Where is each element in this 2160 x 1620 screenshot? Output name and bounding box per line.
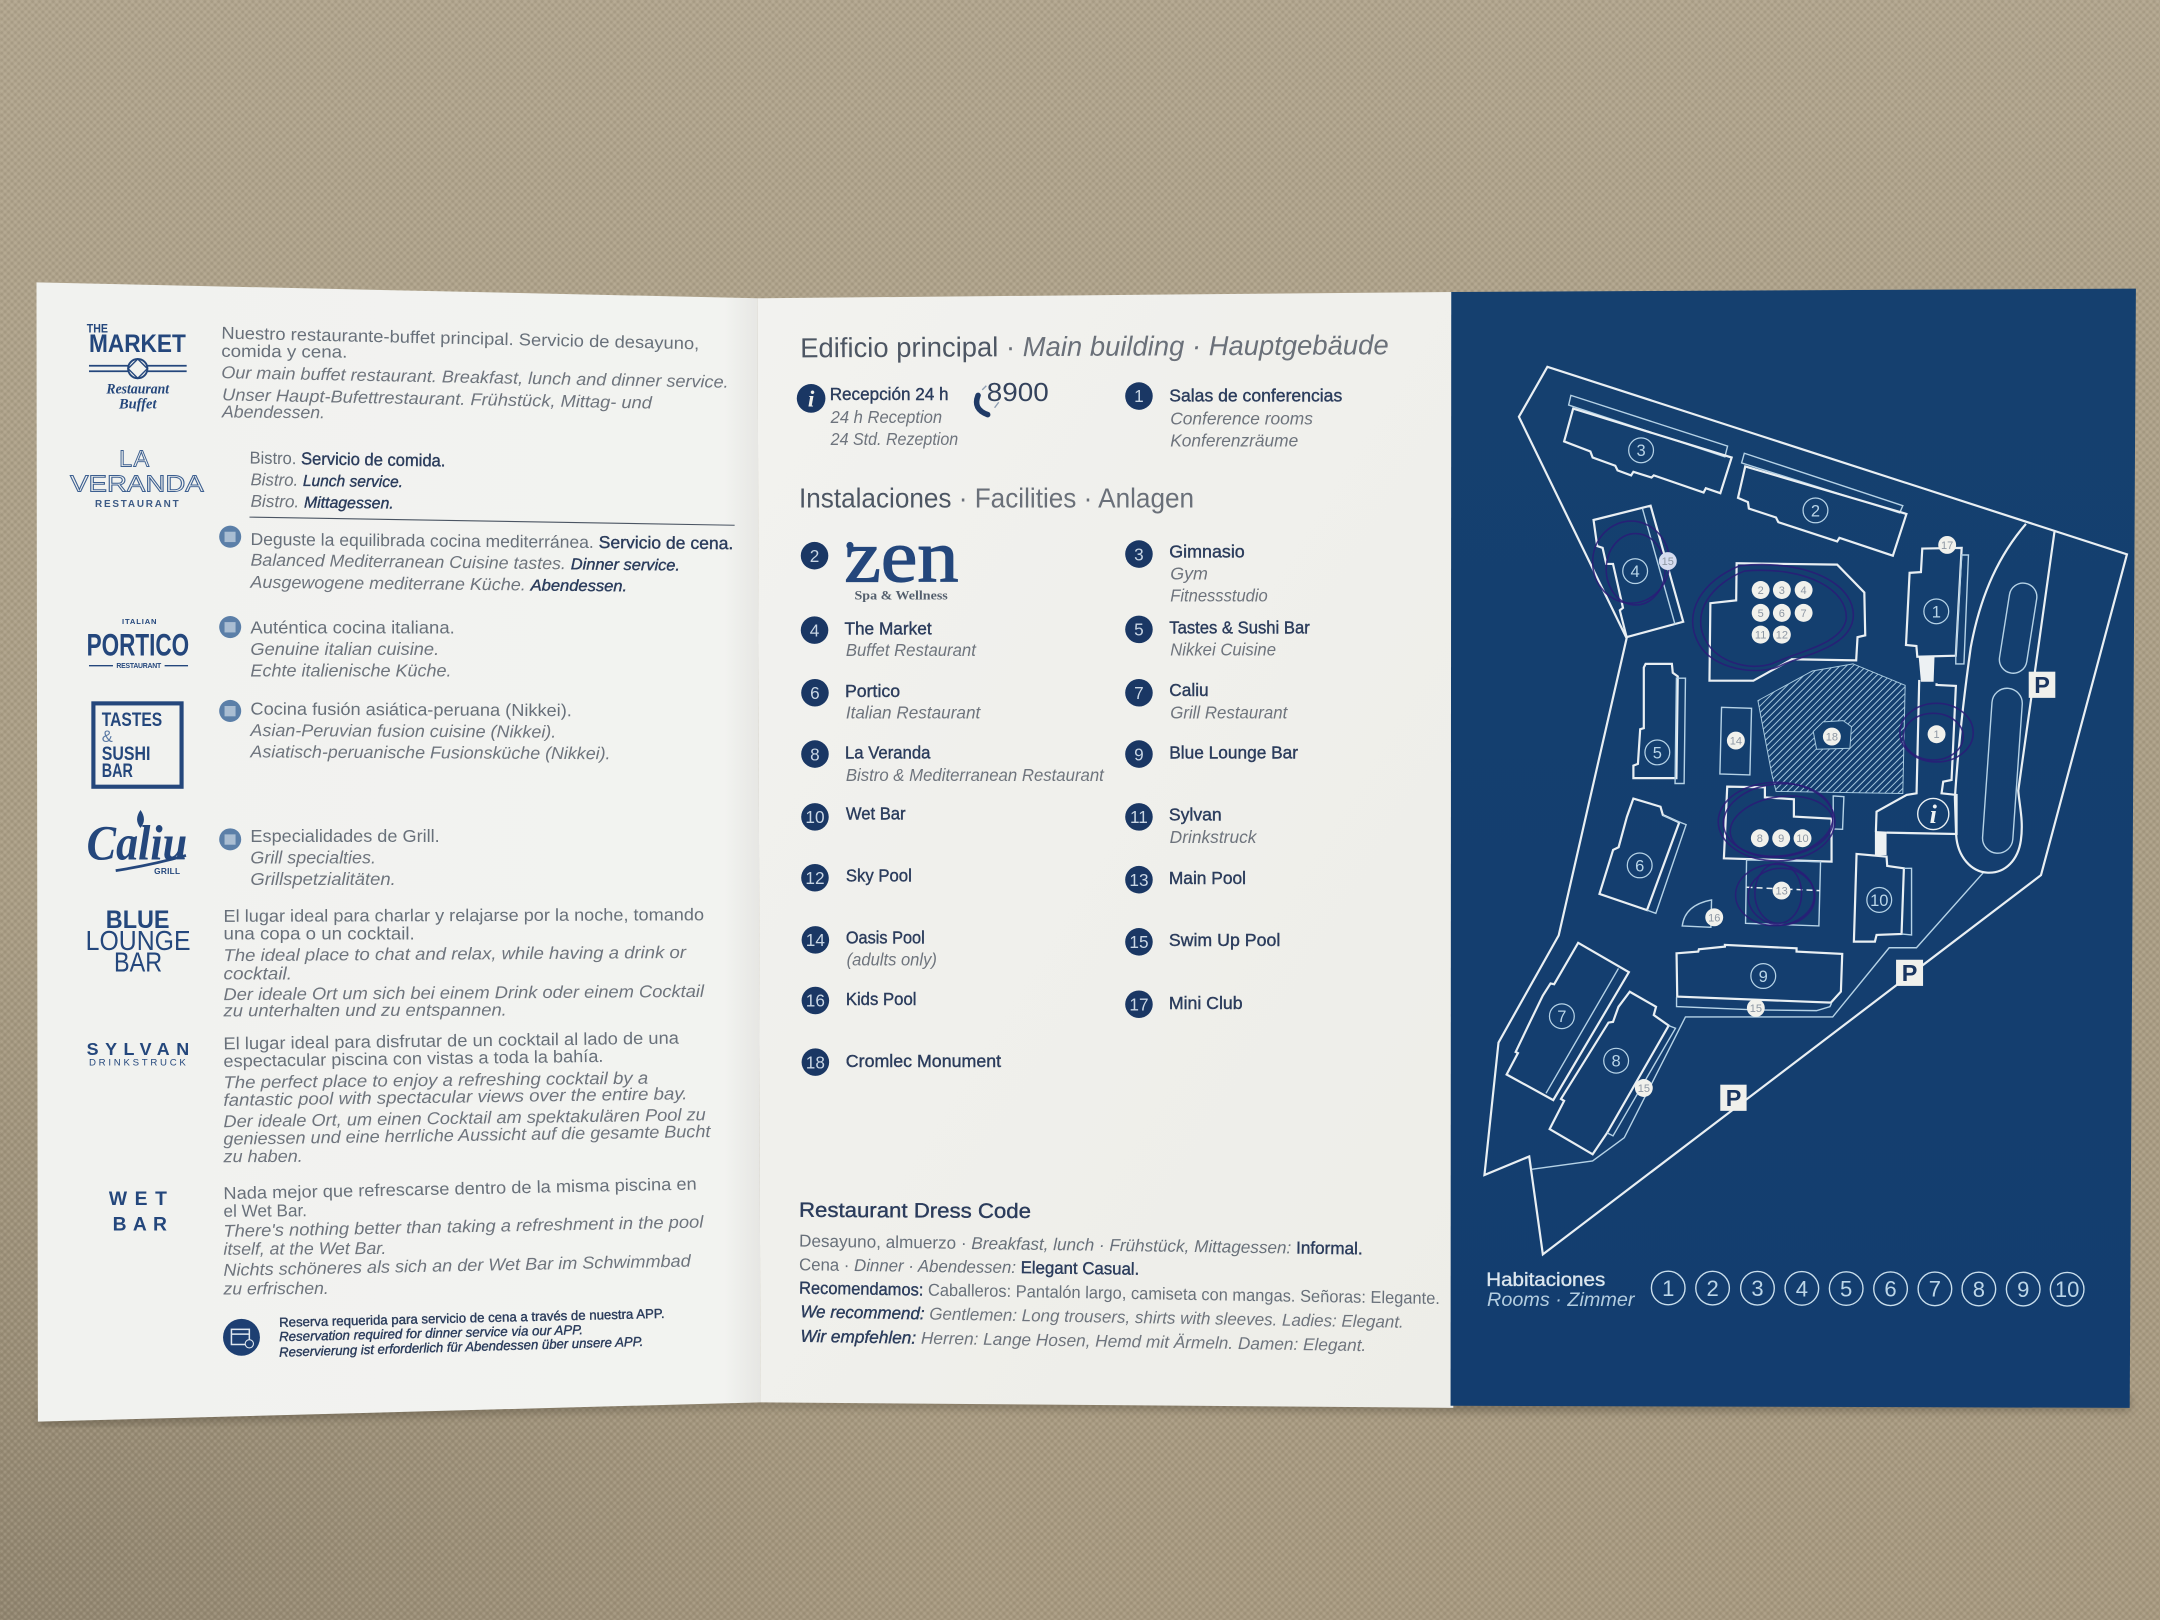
text: The Market description: [221, 323, 729, 422]
map: cromlec hatched area: [1758, 664, 1905, 793]
logo: The Market: [87, 322, 187, 413]
item 15: swim up pool: Swim Up Pool: [1169, 930, 1280, 950]
legend: room numbers: 5: [1840, 1276, 1852, 1301]
item 3: gym: 3: [1134, 544, 1144, 564]
text: dress code: Cena · Dinner · Abendessen: Elegant Casual.: [799, 1254, 1139, 1279]
item 16: kids pool: Kids Pool: [846, 989, 916, 1009]
text: Sylvan description: geniessen und eine herrliche Aussicht auf die gesamte Bucht: [223, 1121, 712, 1149]
map: facility number markers: 14: [1730, 736, 1742, 748]
reception wing: [1875, 680, 1957, 855]
icon: calendar: [219, 828, 241, 850]
reception info: i: [808, 386, 815, 412]
logo: Caliu: GRILL: [154, 867, 180, 876]
text: Wet Bar description: zu erfrischen.: [222, 1278, 329, 1298]
text: La Veranda lunch: Bistro. Servicio de comida.: [249, 448, 446, 470]
map: parking signs: P: [1902, 960, 1917, 986]
main building: [1709, 563, 1865, 681]
map: building number markers: 6: [1635, 856, 1644, 875]
item 8: la veranda: La Veranda: [845, 742, 931, 762]
item 14: oasis pool: 14: [806, 930, 825, 950]
building 8: [1550, 992, 1676, 1154]
map: facility number markers: [1635, 536, 1956, 1097]
map: site boundary: [1484, 367, 2127, 1254]
text: Wet Bar description: Nichts schöneres als sich an der Wet Bar im Schwimmbad: [223, 1250, 692, 1280]
panel: restaurants: [37, 282, 760, 1422]
text: Portico description: Auténtica cocina italiana.: [250, 618, 455, 638]
text: Tastes description: Cocina fusión asiática-peruana (Nikkei).: [250, 699, 572, 720]
building 1: [1906, 548, 1968, 682]
item 10: wet bar: [801, 803, 906, 831]
heading: dress code: Restaurant Dress Code: [799, 1199, 1031, 1223]
item 11: sylvan: Sylvan: [1169, 805, 1222, 825]
logo: La Veranda: VERANDA: [70, 470, 204, 496]
item 11: sylvan: [1125, 803, 1258, 847]
item 4: the market: Buffet Restaurant: [846, 640, 977, 660]
map: building number markers: 2: [1811, 501, 1820, 520]
reception info: Recepción 24 h: [830, 384, 949, 404]
item 13: main pool: 13: [1129, 870, 1149, 890]
logo: La Veranda: LA: [119, 445, 151, 471]
item 15: swim up pool: [1125, 928, 1280, 956]
restaurant building: [1724, 787, 1844, 862]
map: facility number markers: 2: [1758, 585, 1764, 597]
item 15: swim up pool: 15: [1129, 932, 1149, 952]
item 7: caliu: Grill Restaurant: [1170, 702, 1289, 722]
map: facility number markers: 11: [1755, 630, 1766, 642]
map: facility number markers: 5: [1758, 608, 1764, 620]
item 9: blue lounge: Blue Lounge Bar: [1169, 742, 1298, 762]
map: facility number markers: 13: [1775, 886, 1788, 898]
text: The Market description: comida y cena.: [221, 341, 347, 362]
map: parking signs: P: [1726, 1085, 1741, 1111]
map: facility number markers: 18: [1826, 732, 1838, 744]
item 17: mini club: [1125, 990, 1243, 1018]
item 1: conference rooms: Konferenzräume: [1170, 431, 1298, 451]
item 13: main pool: Main Pool: [1169, 868, 1246, 888]
text: The Market description: Abendessen.: [221, 401, 325, 422]
map: info marker: [1918, 798, 1949, 830]
text: dress code: Desayuno, almuerzo · Breakfast, lunch · Frühstück, Mittagessen: Informal.: [799, 1231, 1363, 1258]
text: Caliu description: Grill specialties.: [250, 847, 376, 867]
phone number: 8900: [987, 379, 1049, 407]
text: The Market description: Our main buffet restaurant. Breakfast, lunch and dinner service.: [221, 362, 729, 392]
item 8: la veranda: Bistro & Mediterranean Restaurant: [846, 765, 1105, 785]
item 14: oasis pool: Oasis Pool: [846, 928, 925, 948]
logo: Wet Bar: WET: [109, 1189, 167, 1210]
logo: Wet Bar: BAR: [113, 1214, 167, 1235]
text: Portico description: Genuine italian cuisine.: [250, 639, 439, 659]
icon: calendar: [219, 616, 241, 638]
icon: calendar: [219, 526, 241, 548]
legend: room numbers: 8: [1973, 1277, 1985, 1302]
item 8: la veranda: 8: [810, 744, 820, 764]
text: Tastes description: [249, 699, 611, 763]
item 12: sky pool: 12: [805, 868, 825, 888]
item 7: caliu: [1125, 679, 1289, 722]
logo: The Market: THE: [87, 322, 108, 336]
item 10: wet bar: Wet Bar: [846, 804, 906, 824]
legend: room numbers: 4: [1796, 1276, 1808, 1301]
text: dress code: We recommend: Gentlemen: Long trousers, shirts with sleeves. Ladies: Elegant.: [800, 1301, 1404, 1332]
icon: reservation calendar: [223, 1319, 260, 1356]
item 12: sky pool: Sky Pool: [846, 866, 912, 886]
logo: The Market: Buffet: [118, 397, 157, 413]
text: The Market description: Unser Haupt-Bufettrestaurant. Frühstück, Mittag- und: [222, 384, 654, 413]
map: facility number markers: 3: [1779, 585, 1785, 597]
item 7: caliu: 7: [1134, 683, 1144, 703]
item 11: sylvan: Drinkstruck: [1170, 827, 1258, 847]
logo: Sylvan: SYLVAN: [87, 1039, 189, 1059]
item 16: kids pool: 16: [806, 991, 825, 1011]
map: parking signs: P: [2034, 672, 2050, 698]
map: facility number markers: 15: [1750, 1003, 1762, 1015]
item 5: tastes: Nikkei Cuisine: [1170, 640, 1276, 660]
text: Blue Lounge description: una copa o un cocktail.: [224, 923, 415, 943]
kids pool 16: [1682, 900, 1712, 927]
reception info: [797, 384, 958, 449]
building 10: [1854, 854, 1912, 942]
legend: room numbers: 9: [2017, 1277, 2029, 1302]
legend: room numbers: 6: [1884, 1277, 1897, 1302]
legend: room numbers: 7: [1929, 1277, 1941, 1302]
building 9: [1677, 945, 1842, 1011]
logo: Tastes & Sushi Bar: TASTES: [102, 710, 162, 731]
item 3: gym: Fitnessstudio: [1170, 586, 1268, 606]
map: facility number markers: 7: [1801, 608, 1807, 620]
item 18: cromlec monument: Cromlec Monument: [846, 1051, 1001, 1071]
map: central buildings and pools: [1677, 680, 1957, 1011]
logo: The Market: Restaurant: [105, 382, 170, 398]
text: Caliu description: [250, 826, 440, 889]
map: facility number markers: 16: [1708, 912, 1720, 924]
item 6: portico: 6: [810, 683, 820, 703]
logo: Portico: PORTICO: [87, 627, 189, 663]
item 1: conference rooms: Salas de conferencias: [1169, 386, 1342, 406]
item 1: conference rooms: Conference rooms: [1170, 408, 1313, 428]
map: building 6: [1599, 799, 1686, 913]
text: Tastes description: Asiatisch-peruanische Fusionsküche (Nikkei).: [249, 741, 611, 763]
item 6: portico: [801, 679, 981, 722]
map: building number markers: 5: [1653, 743, 1662, 762]
text: Blue Lounge description: [222, 904, 705, 1020]
item 12: sky pool: [801, 864, 912, 892]
item 3: gym: Gimnasio: [1169, 541, 1245, 561]
item 2: zen spa: [801, 517, 958, 603]
map: road: [1955, 524, 2054, 873]
legend: rooms label: Rooms · Zimmer: [1487, 1290, 1636, 1311]
map: building number markers: 9: [1759, 967, 1768, 986]
item 4: the market: 4: [810, 620, 820, 640]
building 7: [1507, 943, 1629, 1100]
building 3: [1564, 395, 1732, 493]
text: La Veranda dinner: Deguste la equilibrada cocina mediterránea. Servicio de cena.: [250, 529, 733, 553]
item 4: the market: [801, 616, 977, 660]
panel: resort map: [1451, 289, 2136, 1408]
building 5: [1633, 664, 1685, 784]
item 13: main pool: [1125, 866, 1246, 893]
map: facility number markers: 15: [1662, 556, 1674, 568]
text: Sylvan description: The perfect place to enjoy a refreshing cocktail by a: [223, 1068, 648, 1092]
legend: room numbers: 2: [1706, 1276, 1719, 1301]
text: Sylvan description: fantastic pool with spectacular views over the entire bay.: [223, 1083, 688, 1110]
logo: Blue Lounge Bar: BAR: [114, 947, 162, 978]
item 11: sylvan: 11: [1130, 807, 1148, 827]
text: Caliu description: Especialidades de Grill.: [250, 826, 440, 846]
item 2: zen spa: 2: [810, 546, 819, 566]
item 6: portico: Portico: [845, 681, 900, 701]
item 16: kids pool: [802, 987, 916, 1014]
text: Sylvan description: zu haben.: [222, 1146, 303, 1166]
logo: Tastes & Sushi Bar: [93, 703, 182, 787]
map: facility number markers: 4: [1801, 585, 1807, 597]
item 6: portico: Italian Restaurant: [846, 702, 981, 722]
text: dress code: Recomendamos: Caballeros: Pantalón largo, camiseta con mangas. Señoras: Elegante.: [799, 1278, 1440, 1308]
logo: Tastes & Sushi Bar: BAR: [102, 761, 133, 782]
item 2: zen spa: zen: [844, 517, 958, 599]
logo: Sylvan: DRINKSTRUCK: [89, 1057, 186, 1068]
item 3: gym: [1125, 540, 1268, 606]
item 4: the market: The Market: [844, 618, 932, 638]
map: info marker: i: [1930, 800, 1938, 829]
map: facility number markers: 6: [1779, 608, 1785, 620]
text: Tastes description: Asian-Peruvian fusion cuisine (Nikkei).: [249, 720, 556, 742]
text: La Veranda lunch: Bistro. Lunch service.: [250, 469, 403, 491]
text: dress code: Wir empfehlen: Herren: Lange Hosen, Hemd mit Ärmeln. Damen: Elegant.: [800, 1326, 1366, 1355]
map: ink scribbles: [1593, 521, 1973, 926]
text: Caliu description: Grillspetzialitäten.: [250, 869, 396, 889]
text: Blue Lounge description: cocktail.: [224, 963, 292, 983]
logo: Portico: ITALIAN: [122, 617, 156, 626]
map: thin pool ovals: [1982, 581, 2039, 854]
text: Blue Lounge description: El lugar ideal para charlar y relajarse por la noche, tomando: [224, 904, 704, 926]
item 8: la veranda: [801, 740, 1105, 785]
map: facility number markers: 8: [1757, 833, 1763, 845]
text: Sylvan description: espectacular piscina con vistas a toda la bahía.: [223, 1046, 604, 1071]
text: Sylvan description: Der ideale Ort, um einen Cocktail am spektakulären Pool zu: [223, 1104, 706, 1131]
text: Wet Bar description: Nada mejor que refrescarse dentro de la misma piscina en: [223, 1173, 697, 1203]
oasis pool 14: [1720, 707, 1752, 775]
text: Wet Bar description: There's nothing better than taking a refreshment in the pool: [223, 1212, 705, 1241]
logo: Portico: [87, 617, 189, 670]
map: parking signs: [1720, 672, 2055, 1111]
phone number: [977, 379, 1049, 415]
item 3: gym: Gym: [1170, 563, 1208, 583]
item 18: cromlec monument: 18: [806, 1052, 825, 1072]
text: Portico description: Echte italienische Küche.: [250, 660, 452, 680]
logo: The Market: MARKET: [89, 331, 186, 358]
item 9: blue lounge: 9: [1134, 744, 1144, 764]
text: reservation note: Reservation required for dinner service via our APP.: [279, 1322, 583, 1344]
map: facility number markers: 10: [1796, 833, 1809, 845]
logo: Caliu: Caliu: [87, 816, 187, 871]
text: La Veranda dinner: [249, 529, 733, 595]
map: inner path: [1532, 873, 1983, 1169]
legend: room numbers: 1: [1662, 1276, 1674, 1301]
item 7: caliu: Caliu: [1169, 680, 1209, 700]
legend: room numbers: [1651, 1271, 2084, 1306]
text: The Market description: Nuestro restaurante-buffet principal. Servicio de desayuno,: [221, 323, 699, 353]
map: building number markers: 7: [1557, 1007, 1566, 1026]
main pool 13: [1746, 860, 1821, 926]
item 5: tastes: 5: [1134, 620, 1144, 640]
item 17: mini club: 17: [1129, 994, 1149, 1014]
logo: Wet Bar: [109, 1189, 167, 1235]
item 14: oasis pool: (adults only): [847, 950, 937, 970]
text: Wet Bar description: [222, 1173, 705, 1298]
text: Portico description: [250, 618, 455, 680]
text: Sylvan description: [222, 1028, 712, 1166]
map: facility number markers: 1: [1933, 729, 1940, 741]
item 18: cromlec monument: [802, 1048, 1001, 1076]
text: Wet Bar description: itself, at the Wet Bar.: [223, 1238, 386, 1259]
logo: Portico: RESTAURANT: [116, 663, 162, 670]
logo: La Veranda: RESTAURANT: [95, 499, 179, 510]
legend: room numbers: 3: [1751, 1276, 1764, 1301]
building 2: [1738, 453, 1906, 556]
item 2: zen spa: Spa & Wellness: [854, 588, 948, 603]
logo: Sylvan: [87, 1039, 189, 1068]
map: facility number markers: 17: [1941, 540, 1953, 552]
legend: room numbers: 10: [2055, 1277, 2079, 1302]
logo: Tastes & Sushi Bar: &: [102, 727, 113, 746]
text: Blue Lounge description: zu unterhalten und zu entspannen.: [222, 1000, 507, 1020]
reception info: 24 h Reception: [830, 407, 942, 427]
map: facility number markers: 9: [1778, 833, 1784, 845]
map: building number markers: 8: [1612, 1052, 1621, 1071]
text: La Veranda lunch: Bistro. Mittagessen.: [250, 491, 394, 513]
text: reservation note: Reservierung ist erforderlich für Abendessen über unsere APP.: [279, 1334, 644, 1360]
map: building number markers: 10: [1870, 891, 1888, 910]
item 1: conference rooms: [1125, 382, 1342, 451]
heading: facilities: Instalaciones · Facilities · Anlagen: [799, 482, 1194, 513]
item 17: mini club: Mini Club: [1169, 993, 1243, 1013]
panel: facilities: [758, 292, 1453, 1408]
text: La Veranda dinner: Ausgewogene mediterrane Küche. Abendessen.: [249, 572, 627, 595]
item 9: blue lounge: [1125, 740, 1298, 768]
item 10: wet bar: 10: [805, 807, 825, 827]
logo: Blue Lounge Bar: BLUE: [106, 907, 170, 934]
text: reservation note: [279, 1306, 665, 1360]
text: Wet Bar description: el Wet Bar.: [223, 1200, 307, 1221]
logo: Tastes & Sushi Bar: SUSHI: [102, 744, 150, 765]
map: building number markers: [1549, 438, 1949, 1073]
map: facility number markers: 12: [1776, 630, 1788, 642]
map: building number markers: 4: [1631, 562, 1640, 581]
text: Blue Lounge description: Der ideale Ort um sich bei einem Drink oder einem Cocktail: [223, 981, 705, 1004]
icon: calendar: [219, 700, 241, 722]
legend: rooms label: [1486, 1270, 1636, 1311]
building 4: [1594, 506, 1683, 637]
logo: Blue Lounge Bar: LOUNGE: [86, 925, 191, 956]
heading: main building: Edificio principal · Main building · Hauptgebäude: [800, 329, 1389, 363]
text: La Veranda dinner: Balanced Mediterranean Cuisine tastes. Dinner service.: [250, 550, 680, 575]
text: dress code: [799, 1231, 1440, 1355]
reception info: 24 Std. Rezeption: [830, 429, 958, 449]
item 5: tastes: [1125, 616, 1310, 660]
legend: rooms label: Habitaciones: [1486, 1270, 1605, 1291]
item 5: tastes: Tastes & Sushi Bar: [1169, 617, 1310, 637]
map: facility number markers: 15: [1638, 1083, 1650, 1095]
map: building number markers: 1: [1932, 602, 1941, 621]
map: building number markers: 3: [1636, 441, 1646, 460]
map: buildings, lower sheet: [1507, 943, 1676, 1154]
logo: Blue Lounge Bar: [86, 907, 191, 978]
map: buildings, upper sheet: [1564, 395, 1968, 784]
item 1: conference rooms: 1: [1134, 386, 1144, 406]
text: reservation note: Reserva requerida para servicio de cena a través de nuestra APP.: [279, 1306, 665, 1330]
item 14: oasis pool: [802, 926, 937, 970]
text: Sylvan description: El lugar ideal para disfrutar de un cocktail al lado de una: [223, 1028, 679, 1053]
text: La Veranda lunch: [249, 448, 446, 513]
logo: La Veranda: [70, 445, 204, 510]
text: Blue Lounge description: The ideal place to chat and relax, while having a drink or: [223, 942, 687, 965]
booklet shadow: [39, 1394, 2130, 1426]
